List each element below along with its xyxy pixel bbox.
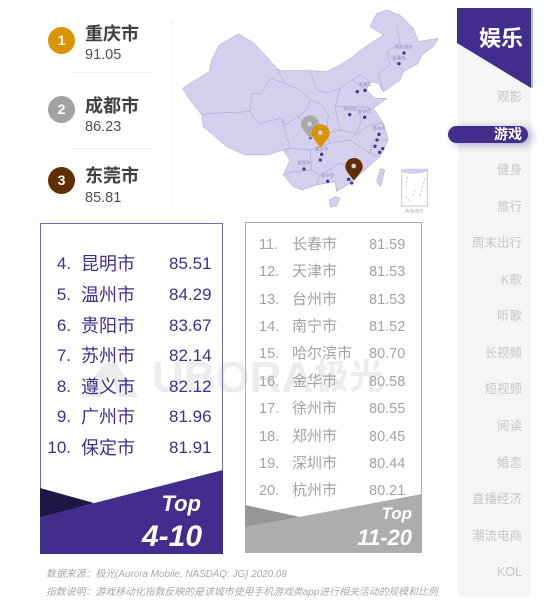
sidebar items: 长视频 xyxy=(484,346,522,360)
badge 2: 2 xyxy=(58,101,65,117)
ranking rows: 83.67 xyxy=(169,316,212,335)
ranking rows xyxy=(47,254,212,458)
banner: top 4-10 xyxy=(40,470,223,554)
pin: Dongguan xyxy=(345,158,363,181)
ranking rows: 郑州市 xyxy=(292,428,337,445)
ranking rows: 81.53 xyxy=(369,264,405,280)
ranking rows: 4. xyxy=(57,254,71,273)
ranking rows: 81.53 xyxy=(369,292,405,308)
ranking rows: 80.44 xyxy=(369,456,405,472)
watermark xyxy=(82,353,384,402)
badge 3: 3 xyxy=(58,172,65,188)
banner: top 11-20: Top xyxy=(381,504,412,523)
ranking rows: 85.51 xyxy=(169,254,212,273)
ranking rows xyxy=(259,236,405,499)
ranking rows: 长春市 xyxy=(292,236,337,253)
sidebar items: 周末出行 xyxy=(472,236,522,250)
city 3: 东莞市 xyxy=(85,166,139,186)
banner: top 11-20: 11-20 xyxy=(357,525,413,550)
ranking rows: 深圳市 xyxy=(292,455,337,472)
ranking rows: 82.12 xyxy=(169,377,212,396)
city labels: 郑州市 xyxy=(343,105,357,112)
score 1: 91.05 xyxy=(85,47,121,63)
ranking rows: 广州市 xyxy=(81,407,135,427)
sidebar items: 直播经济 xyxy=(472,492,522,506)
ranking rows: 12. xyxy=(259,264,279,280)
panel: top 3 cities xyxy=(48,24,152,206)
ranking rows: 15. xyxy=(259,346,279,362)
south china sea inset xyxy=(402,169,427,215)
ranking rows: 遵义市 xyxy=(81,377,135,397)
ranking rows: 台州市 xyxy=(292,291,337,308)
ranking rows: 哈尔滨市 xyxy=(292,345,352,362)
city labels: 遵义市 xyxy=(315,146,329,153)
sidebar items: 短视频 xyxy=(484,382,522,396)
sidebar items: 阅读 xyxy=(497,419,522,433)
index note: 指数说明：游戏移动化指数反映的是该城市使用手机游戏类app进行相关活动的规模和比例 xyxy=(46,587,438,598)
south china sea inset: 南海诸岛 xyxy=(405,208,424,215)
ranking rows: 金华市 xyxy=(292,373,337,390)
watermark: 极光 xyxy=(314,358,384,397)
ranking rows: 18. xyxy=(259,429,279,445)
sidebar items: 观影 xyxy=(497,90,522,104)
badge 1: 1 xyxy=(58,32,65,48)
sidebar items: 旅行 xyxy=(497,200,522,214)
divider 1 xyxy=(72,72,152,73)
ranking rows: 84.29 xyxy=(169,285,212,304)
ranking rows: 6. xyxy=(57,316,71,335)
city labels: 苏州市 xyxy=(373,125,386,132)
ranking rows: 11. xyxy=(259,237,278,253)
ranking rows: 5. xyxy=(57,285,71,304)
active item pill xyxy=(448,126,528,143)
city labels: 南宁市 xyxy=(321,172,335,179)
city labels: 昆明市 xyxy=(298,160,311,167)
ranking rows: 10. xyxy=(47,438,71,457)
ranking rows: 81.91 xyxy=(169,438,212,457)
city 2: 成都市 xyxy=(85,96,139,116)
active item pill: 游戏 xyxy=(494,126,522,142)
city labels: 天津市 xyxy=(359,81,372,88)
pin: Chengdu xyxy=(301,115,319,138)
sidebar panel xyxy=(458,8,531,597)
category banner xyxy=(457,8,533,88)
sidebar items: 听歌 xyxy=(497,309,522,323)
sidebar items: K歌 xyxy=(501,273,522,287)
ranking rows: 80.45 xyxy=(369,429,405,445)
badge 3 xyxy=(48,167,75,194)
ranking rows: 8. xyxy=(57,377,71,396)
banner: top 4-10: 4-10 xyxy=(141,520,202,553)
score 2: 86.23 xyxy=(85,119,121,135)
ranking rows: 80.58 xyxy=(369,374,405,390)
ranking rows: 80.70 xyxy=(369,346,405,362)
sidebar items: KOL xyxy=(497,565,522,579)
ranking rows: 天津市 xyxy=(292,263,337,280)
city 1: 重庆市 xyxy=(85,24,139,44)
ranking rows: 82.14 xyxy=(169,346,212,365)
ranking rows: 贵阳市 xyxy=(81,316,135,336)
sidebar items xyxy=(472,90,522,579)
watermark: UBORA xyxy=(152,353,313,402)
panel: top 11-20 xyxy=(245,222,422,553)
ranking rows: 温州市 xyxy=(81,285,135,305)
ranking rows: 20. xyxy=(259,483,279,499)
ranking rows: 16. xyxy=(259,374,279,390)
ranking rows: 昆明市 xyxy=(81,254,135,274)
badge 1 xyxy=(48,27,75,54)
banner: top 4-10: Top xyxy=(162,491,201,516)
province borders xyxy=(202,23,403,185)
banner: top 11-20 xyxy=(245,494,421,552)
map of China xyxy=(182,10,438,215)
score 3: 85.81 xyxy=(85,190,121,206)
ranking rows: 81.59 xyxy=(369,237,405,253)
ranking rows: 14. xyxy=(259,319,279,335)
pin: Chongqing xyxy=(312,124,330,148)
ranking rows: 南宁市 xyxy=(292,318,337,335)
divider 2 xyxy=(72,148,152,149)
source note: 数据来源：极光(Aurora Mobile, NASDAQ: JG) 2020.08 xyxy=(46,569,287,580)
ranking rows: 苏州市 xyxy=(81,346,135,366)
ranking rows: 19. xyxy=(259,456,279,472)
category banner: 娱乐 xyxy=(479,26,523,51)
city labels: 哈尔滨市 xyxy=(395,44,413,51)
map land xyxy=(183,10,438,207)
badge 2 xyxy=(48,96,75,123)
vertical divider xyxy=(171,20,172,207)
sidebar items: 潮流电商 xyxy=(472,529,522,543)
city labels xyxy=(298,44,413,179)
ranking rows: 7. xyxy=(57,346,71,365)
ranking rows: 80.55 xyxy=(369,401,405,417)
ranking rows: 9. xyxy=(57,407,71,426)
ranking rows: 80.21 xyxy=(369,483,405,499)
sidebar items: 健身 xyxy=(497,163,522,177)
city dots xyxy=(302,51,406,185)
ranking rows: 13. xyxy=(259,292,279,308)
city labels: 长春市 xyxy=(393,54,406,61)
ranking rows: 徐州市 xyxy=(292,400,337,417)
ranking rows: 杭州市 xyxy=(292,482,337,499)
ranking rows: 17. xyxy=(259,401,279,417)
city labels: 徐州市 xyxy=(358,108,372,115)
ranking rows: 81.52 xyxy=(369,319,405,335)
ranking rows: 保定市 xyxy=(81,438,135,458)
ranking rows: 81.96 xyxy=(169,407,212,426)
sidebar items: 婚恋 xyxy=(497,456,522,470)
panel: top 4-10 xyxy=(40,223,223,554)
